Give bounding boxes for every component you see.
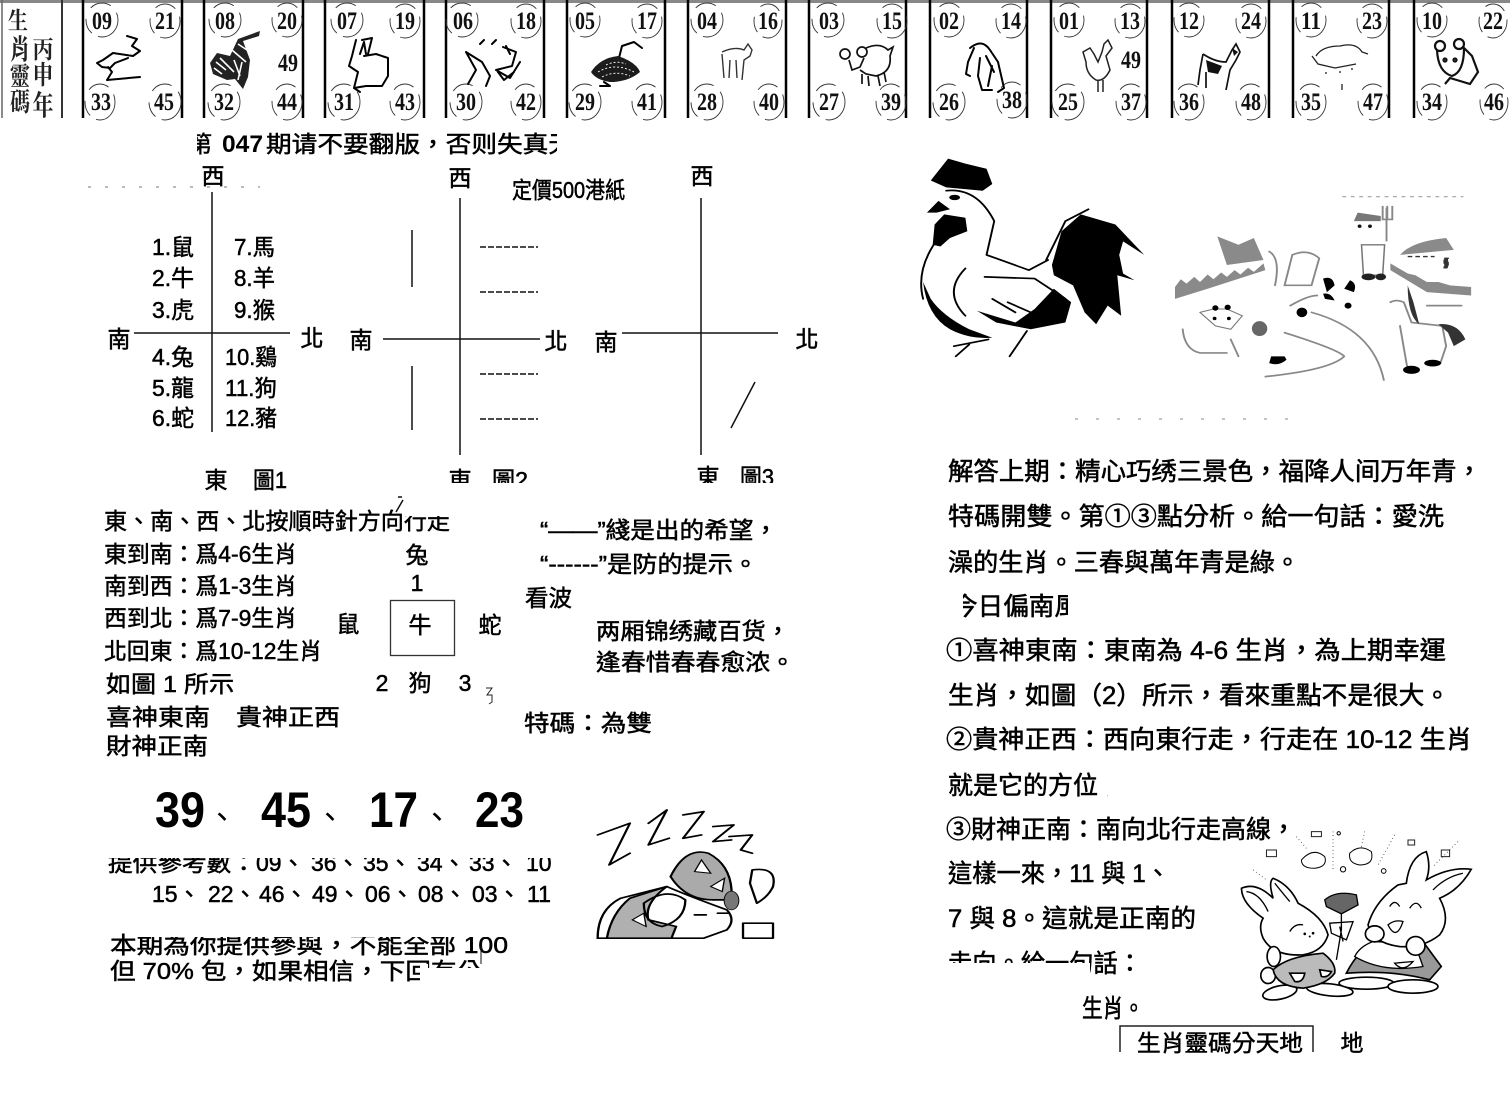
panel: rabbit numbers: 07 (337, 8, 357, 35)
key numbers: 23 (475, 782, 524, 838)
key numbers: 、 (207, 802, 237, 835)
panel: goat numbers: 39 (881, 89, 901, 116)
text block: analysis: 就是它的方位； (948, 772, 1123, 800)
diagram: figure 1 compass: 11.狗 (225, 375, 277, 401)
illustration: farm scene (1175, 197, 1471, 380)
icon: pig (1312, 45, 1368, 90)
diagram: figure 2 compass: 圖2 (492, 467, 528, 493)
diagram: figure 1 compass: 10.鷄 (225, 344, 277, 370)
diagram: figure 1 compass: 北 (300, 325, 324, 351)
diagram: figure 2 compass: 南 (350, 327, 372, 353)
diagram: figure 1 compass: 2.牛 (152, 265, 194, 291)
diagram: figure 1 compass: 8.羊 (234, 265, 275, 291)
panel: dog numbers: 36 (1179, 89, 1199, 116)
heading: issue notice (180, 130, 587, 160)
diagram: figure 3 compass (594, 163, 818, 490)
text block: reference numbers: 03、 (472, 881, 521, 907)
text block: analysis: 生肖。 (1082, 995, 1144, 1023)
key numbers: 、 (422, 802, 452, 835)
text block: line legend and verse: “——”綫是出的希望， (540, 517, 778, 543)
text block: disclaimer (110, 925, 510, 986)
text block: reference numbers: 35、 (363, 850, 412, 876)
text block: line legend and verse: 看波 (525, 585, 572, 611)
panel: rat 2 numbers: 46 (1484, 89, 1504, 116)
diagram: figure 1 compass: 4.兔 (152, 344, 194, 370)
panel: tiger numbers: 49 (278, 50, 298, 77)
text block: line legend and verse: 逢春惜春春愈浓。 (596, 649, 795, 675)
panel: dragon numbers: 30 (456, 89, 476, 116)
panel: strip title (2, 0, 62, 122)
panel: dog numbers (1172, 0, 1269, 120)
diagram: figure 3 compass: 東 (696, 464, 720, 490)
icon: dog (1198, 44, 1240, 90)
panel: dragon numbers: 06 (453, 8, 473, 35)
panel: strip title: 丙 (32, 37, 54, 64)
panel: strip title: 申 (32, 61, 54, 90)
panel: rat 2 numbers: 10 (1422, 8, 1442, 35)
text block: reference numbers: 36、 (311, 850, 360, 876)
panel: rat numbers (83, 0, 182, 120)
diagram: figure 2 compass: 北 (544, 328, 568, 354)
diagram: figure 3 compass: 圖3 (740, 464, 774, 490)
footer: title box: 地 (1340, 1030, 1364, 1056)
panel: dragon numbers (446, 0, 544, 120)
panel: rabbit numbers: 31 (334, 89, 354, 116)
panel: dragon numbers: 42 (516, 89, 536, 116)
panel: rooster numbers: 37 (1121, 89, 1141, 116)
diagram: zodiac cross (336, 542, 502, 704)
heading: issue notice: 第 (189, 131, 212, 157)
panel: rat numbers: 09 (92, 8, 112, 35)
panel: rooster numbers: 13 (1120, 8, 1140, 35)
illustration: rooster (921, 159, 1144, 356)
diagram: figure 3 compass: 南 (594, 329, 618, 355)
panel: snake numbers: 05 (575, 8, 595, 35)
text block: analysis: 7 與 8。這就是正南的 (948, 905, 1196, 933)
diagram: figure 1 compass: 7.馬 (234, 234, 275, 260)
panel: rat 2 numbers: 22 (1483, 8, 1503, 35)
panel: snake numbers: 41 (637, 89, 657, 116)
text block: reference numbers (100, 845, 555, 907)
panel: dog numbers: 48 (1241, 89, 1261, 116)
text block: line legend and verse: 特碼：為雙 (524, 710, 652, 736)
panel: strip title: 年 (32, 90, 54, 122)
panel: goat numbers: 27 (819, 89, 839, 116)
panel: strip title: 生 (8, 8, 28, 35)
key numbers: 39 (155, 782, 205, 838)
text block: reference numbers: 15、 (152, 881, 201, 907)
text block: previous answer: 解答上期：精心巧绣三景色，福降人间万年青， (948, 458, 1482, 486)
text block: reference numbers: 46、 (259, 881, 308, 907)
panel: tiger numbers: 08 (215, 8, 235, 35)
panel: ox numbers: 28 (697, 89, 717, 116)
text block: line legend and verse: “------”是防的提示。 (540, 551, 758, 577)
icon: ox (722, 44, 752, 80)
text block: direction rules: 東、南、西、北按順時針方向行走 (104, 508, 450, 534)
key numbers: 45 (261, 782, 311, 838)
panel: rat numbers: 21 (155, 8, 175, 35)
panel: goat numbers: 03 (819, 8, 839, 35)
heading: issue notice: 047 (222, 131, 263, 158)
icon: rabbit (349, 38, 388, 92)
panel: tiger numbers: 20 (277, 8, 297, 35)
panel: snake numbers: 29 (575, 89, 595, 116)
diagram: figure 1 compass: 12.豬 (225, 405, 277, 431)
text block: reference numbers: 11 (527, 881, 551, 907)
diagram: zodiac cross: 牛 (408, 612, 432, 638)
text block: line legend and verse: 两厢锦绣藏百货， (596, 618, 790, 644)
icon: monkey (966, 43, 1004, 92)
text block: reference numbers: 22、 (208, 881, 257, 907)
diagram: figure 1 compass: 圖1 (253, 467, 287, 493)
key numbers: 、 (315, 802, 345, 835)
panel: snake numbers: 17 (637, 8, 657, 35)
diagram: zodiac cross: 鼠 (336, 611, 360, 637)
text block: disclaimer: 本期為你提供參與，不能全部 100 (110, 932, 508, 958)
icon: dragon (466, 40, 520, 86)
panel: goat numbers: 15 (882, 8, 902, 35)
panel: rabbit numbers (325, 0, 424, 120)
text block: reference numbers: 34、 (417, 850, 466, 876)
diagram: figure 1 compass: 西 (202, 163, 224, 189)
text block: direction rules: 北回東：爲10-12生肖 (104, 638, 322, 664)
text block: analysis: 走向。給一句話： (948, 950, 1142, 978)
text block: previous answer (948, 458, 1482, 577)
illustration: sleeping cap character (598, 810, 774, 938)
icon: tiger (210, 31, 260, 89)
footer: title box (1120, 1026, 1364, 1056)
panel: pig numbers: 23 (1362, 8, 1382, 35)
panel: rat numbers: 45 (154, 89, 174, 116)
text block: direction rules: 如圖 1 所示 (106, 671, 234, 697)
diagram: zodiac cross: 2 (376, 670, 388, 696)
illustration: two rabbits with flower (1241, 832, 1471, 1003)
diagram: figure 1 compass (108, 163, 324, 493)
text block: analysis (940, 590, 1472, 1023)
icon: rooster small (1083, 40, 1112, 92)
panel: tiger numbers: 44 (277, 89, 297, 116)
diagram: figure 1 compass: 1.鼠 (152, 234, 194, 260)
key numbers: 17 (369, 782, 418, 838)
panel: monkey numbers: 26 (939, 89, 959, 116)
panel: rat numbers: 33 (91, 89, 111, 116)
diagram: zodiac cross: 1 (411, 570, 423, 596)
panel: dog numbers: 12 (1179, 8, 1199, 35)
panel: rooster numbers: 49 (1121, 47, 1141, 74)
panel: rat 2 numbers: 34 (1422, 89, 1442, 116)
panel: pig numbers: 47 (1363, 89, 1383, 116)
diagram: zodiac cross: 3 (459, 670, 471, 696)
diagram: figure 2 compass: 定價500港紙 (512, 177, 625, 203)
text block: direction rules (104, 497, 454, 759)
panel: dragon numbers: 18 (516, 8, 536, 35)
panel: ox numbers: 04 (697, 8, 717, 35)
icon: mouse (1435, 39, 1478, 84)
panel: ox numbers: 16 (758, 8, 778, 35)
panel: monkey numbers: 14 (1001, 8, 1021, 35)
panel: rooster numbers: 01 (1059, 8, 1079, 35)
diagram: figure 3 compass: 西 (690, 163, 714, 189)
text block: reference numbers: 提供參考數： (108, 850, 256, 876)
diagram: figure 1 compass: 南 (108, 326, 130, 352)
panel: rooster numbers (1051, 0, 1147, 120)
footer: title box: 生肖靈碼分天地 (1137, 1030, 1303, 1056)
text block: reference numbers: 09、 (256, 850, 305, 876)
text block: reference numbers: 49、 (312, 881, 361, 907)
text block: reference numbers: 33、 (469, 850, 518, 876)
diagram: zodiac cross: 狗 (408, 670, 432, 696)
diagram: figure 1 compass: 6.蛇 (152, 405, 194, 431)
panel: zodiac number strip (2, 0, 1508, 122)
text block: reference numbers: 10 (526, 850, 552, 876)
panel: rabbit numbers: 43 (395, 89, 415, 116)
icon: snake (591, 42, 642, 86)
text block: analysis: 生肖，如圖（2）所示，看來重點不是很大。 (948, 682, 1450, 710)
text block: analysis: 今日偏南風 (952, 593, 1080, 621)
panel: dog numbers: 24 (1241, 8, 1261, 35)
panel: strip title: 碼 (10, 88, 30, 117)
panel: pig numbers (1293, 0, 1389, 120)
diagram: figure 2 compass: 東 (448, 467, 472, 493)
panel: rooster numbers: 25 (1058, 89, 1078, 116)
panel: strip title: 肖 (10, 34, 30, 66)
text block: reference numbers: 06、 (365, 881, 414, 907)
panel: ox numbers: 40 (759, 89, 779, 116)
panel: pig numbers: 11 (1301, 8, 1321, 35)
text block: direction rules: 喜神東南 貴神正西 (106, 704, 340, 730)
panel: ox numbers (688, 0, 786, 120)
key numbers (155, 782, 524, 838)
text block: direction rules: 西到北：爲7-9生肖 (104, 605, 297, 631)
text block: direction rules: 東到南：爲4-6生肖 (104, 541, 297, 567)
text block: analysis: 這樣一來，11 與 1、 (948, 860, 1170, 888)
panel: monkey numbers: 02 (939, 8, 959, 35)
panel: snake numbers (567, 0, 665, 120)
text block: direction rules: 南到西：爲1-3生肖 (104, 573, 297, 599)
text block: analysis: ①喜神東南：東南為 4-6 生肖，為上期幸運 (946, 637, 1446, 665)
text block: analysis: ②貴神正西：西向東行走，行走在 10-12 生肖 (946, 726, 1472, 754)
panel: tiger numbers (204, 0, 303, 120)
text block: previous answer: 澡的生肖。三春與萬年青是綠。 (948, 549, 1300, 577)
diagram: figure 3 compass: 北 (796, 326, 818, 352)
panel: monkey numbers (930, 0, 1027, 120)
diagram: figure 1 compass: 3.虎 (152, 297, 194, 323)
diagram: figure 1 compass: 9.猴 (234, 297, 275, 323)
panel: rat 2 numbers (1414, 0, 1508, 120)
text block: disclaimer: 但 70% 包，如果相信，下回有公 (110, 958, 482, 984)
text block: analysis: ③財神正南：南向北行走高線， (946, 816, 1296, 844)
panel: rabbit numbers: 19 (395, 8, 415, 35)
diagram: figure 1 compass: 東 (204, 467, 228, 493)
panel: tiger numbers: 32 (214, 89, 234, 116)
heading: issue notice: 期请不要翻版，否则失真无 (266, 131, 574, 157)
diagram: zodiac cross: 兔 (406, 542, 428, 568)
diagram: figure 1 compass: 5.龍 (152, 375, 194, 401)
text block: previous answer: 特碼開雙。第①③點分析。給一句話：愛洗 (948, 503, 1444, 531)
diagram: figure 2 compass: 西 (448, 165, 472, 191)
panel: pig numbers: 35 (1301, 89, 1321, 116)
panel: monkey numbers: 38 (1002, 87, 1022, 114)
diagram: figure 2 compass (350, 165, 625, 493)
icon: rat (97, 36, 140, 80)
text block: direction rules: 財神正南 (106, 733, 208, 759)
icon: goat (840, 45, 893, 86)
text block: line legend and verse (524, 517, 795, 736)
diagram: zodiac cross: 蛇 (478, 612, 502, 638)
panel: goat numbers (809, 0, 907, 120)
text block: reference numbers: 08、 (418, 881, 467, 907)
panel: strip title: 靈 (10, 63, 30, 91)
